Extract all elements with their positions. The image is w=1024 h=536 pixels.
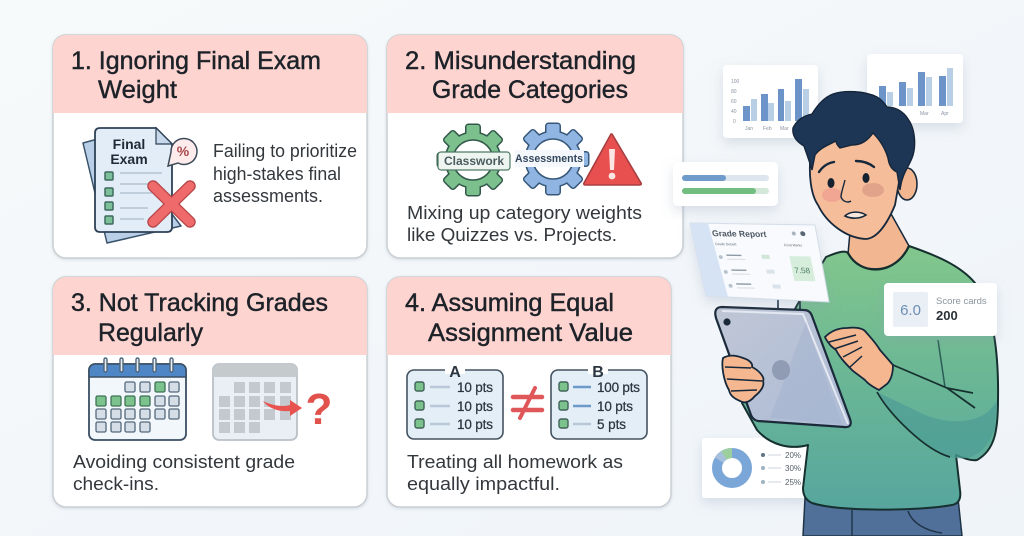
chart: floating donut card: 25% [785, 478, 801, 487]
text: card 4 description: equally impactful. [407, 473, 560, 494]
text: card 1 description: assessments. [213, 185, 323, 206]
chart: floating bar chart left: 0 [733, 119, 736, 125]
chart: floating bar chart left: 60 [731, 99, 737, 105]
card: grade report screen: 7.58 [794, 266, 812, 275]
panel: 2. Misunderstanding Grade Categories [387, 35, 683, 258]
panel: 1. Ignoring Final Exam Weight [53, 35, 367, 258]
icon: final exam document: % [177, 143, 190, 159]
text: card 4 description [407, 451, 623, 494]
chart: floating bar chart left: 40 [731, 109, 737, 115]
panel: 4. Assuming Equal Assignment Value [387, 277, 671, 507]
icon: warning triangle [584, 134, 641, 185]
list B: unequal points: 5 pts [597, 417, 626, 432]
text: card 1 description: high-stakes final [213, 163, 341, 184]
heading: card 1 [71, 47, 321, 104]
tablet strap [778, 300, 800, 309]
icon: assessments gear: Assessments [515, 153, 583, 165]
text: card 3 description: Avoiding consistent grade [73, 451, 295, 472]
heading: card 4: 4. Assuming Equal [405, 289, 614, 317]
list A: equal points: 10 pts [457, 380, 493, 395]
card: grade report screen: Final Marks [784, 243, 803, 247]
icon: final exam document [83, 128, 197, 243]
icon: grey calendar with question mark: ? [306, 385, 332, 434]
text: card 2 description: Mixing up category weights [407, 202, 642, 223]
icon: assessments gear [515, 124, 588, 194]
chart: floating bar chart right [867, 54, 963, 123]
neck [848, 212, 909, 269]
left hand [722, 356, 763, 402]
chart: floating donut card [702, 438, 814, 498]
illustration: worried student with tablet [715, 92, 998, 536]
card: score cards: Score cards [936, 296, 987, 307]
card: score cards [884, 283, 997, 336]
chart: floating bar chart left: Feb [763, 126, 772, 132]
icon: final exam document: Final [113, 136, 145, 152]
icon: classwork gear: Classwork [444, 154, 504, 168]
chart: floating bar chart left [723, 65, 818, 138]
card: grade report screen: Grade Details [715, 242, 737, 246]
chart: floating bar chart right: Mar [920, 111, 929, 117]
text: card 3 description [73, 451, 295, 494]
heading: card 4 [405, 289, 633, 347]
list A: equal points: A [449, 364, 461, 381]
panel: 3. Not Tracking Grades Regularly [53, 277, 367, 507]
heading: card 1: Weight [98, 76, 177, 104]
heading: card 4: Assignment Value [428, 319, 633, 347]
heading: card 3: 3. Not Tracking Grades [71, 289, 328, 317]
icon: final exam document: Exam [110, 151, 148, 167]
chart: floating donut card: 20% [785, 451, 801, 460]
list A: equal points: 10 pts [457, 399, 493, 414]
heading: card 3: Regularly [98, 319, 203, 347]
text: card 2 description: like Quizzes vs. Projects. [407, 224, 617, 245]
head [793, 92, 917, 239]
list B: unequal points [551, 364, 647, 439]
card: grade report screen: Grade Report [711, 228, 767, 239]
green sweater [742, 246, 998, 510]
heading: card 1: 1. Ignoring Final Exam [71, 47, 321, 75]
text: card 1 description: Failing to prioritize [213, 140, 357, 161]
text: card 3 description: check-ins. [73, 473, 159, 494]
list B: unequal points: 100 pts [597, 380, 640, 395]
heading: card 2 [405, 47, 636, 104]
chart: floating bar chart left: 100 [731, 79, 740, 85]
heading: card 3 [71, 289, 328, 347]
card: grade report screen [690, 223, 829, 302]
list B: unequal points: B [592, 364, 604, 381]
icon: classwork gear [438, 125, 510, 195]
tablet [715, 307, 851, 427]
card: score cards: 6.0 [900, 302, 921, 319]
chart: floating bar chart left: Mar [780, 126, 789, 132]
jeans [803, 498, 962, 536]
text: card 1 description [213, 140, 357, 206]
card: score cards: 200 [936, 308, 958, 323]
heading: card 2: Grade Categories [432, 76, 628, 104]
list B: unequal points: 10 pts [597, 399, 633, 414]
chart: floating bar chart left: Jan [745, 126, 753, 132]
heading: card 2: 2. Misunderstanding [405, 47, 636, 75]
list A: equal points: 10 pts [457, 417, 493, 432]
list A: equal points [407, 364, 503, 439]
chart: floating bar chart right: Apr [941, 111, 949, 117]
card: progress bars [673, 162, 778, 206]
icon: checked calendar [89, 358, 186, 440]
text: card 2 description [407, 202, 642, 245]
icon: not equal sign [513, 388, 542, 418]
chart: floating bar chart left: 80 [731, 89, 737, 95]
icon: grey calendar with question mark [213, 364, 332, 440]
text: card 4 description: Treating all homework as [407, 451, 623, 472]
right hand [825, 328, 893, 390]
chart: floating donut card: 30% [785, 464, 801, 473]
